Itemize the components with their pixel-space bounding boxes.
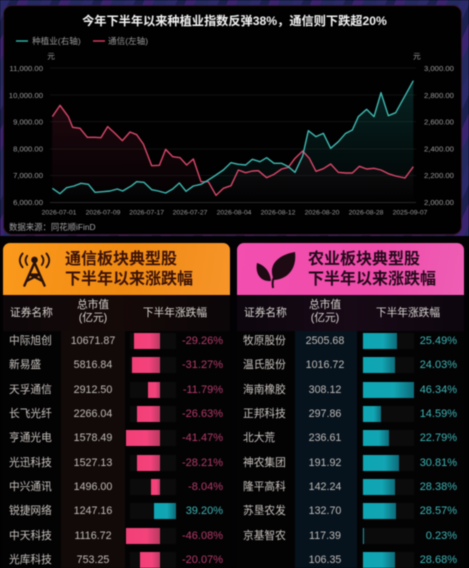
row: 132.70 — [309, 505, 341, 517]
icon: leaves — [256, 251, 296, 289]
row: 30.81% — [420, 457, 457, 469]
right axis: 3,000.00 — [424, 64, 454, 73]
date axis: 2026-07-09 — [86, 210, 121, 216]
left axis: 11,000.00 — [9, 64, 43, 73]
row — [9, 454, 224, 472]
table header: 证券名称 — [244, 307, 287, 319]
row — [9, 527, 224, 545]
right axis — [413, 52, 454, 207]
table header: 证券名称 — [10, 307, 53, 319]
row: 京基智农 — [243, 530, 286, 542]
row: 28.68% — [420, 554, 457, 566]
data source: 数据来源：同花顺iFinD — [9, 222, 96, 232]
left axis: 6,000.00 — [13, 198, 43, 207]
date axis: 2026-07-27 — [173, 210, 208, 216]
row: 长飞光纤 — [9, 408, 52, 420]
date axis: 2025-09-07 — [393, 210, 428, 216]
date axis: 2026-08-28 — [349, 210, 384, 216]
row — [242, 332, 458, 350]
row: 22.79% — [420, 432, 457, 444]
table header: 总市值 — [309, 299, 341, 311]
row — [243, 478, 458, 496]
left axis — [9, 52, 55, 207]
date axis: 2026-07-17 — [129, 210, 164, 216]
date axis: 2026-08-04 — [217, 210, 252, 216]
header title: 农业板块典型股 — [308, 251, 420, 268]
row: 1527.13 — [74, 457, 112, 469]
row: 北大荒 — [243, 432, 275, 444]
date axis — [42, 210, 428, 216]
table header: 下半年涨跌幅 — [376, 307, 440, 319]
row: 0.23% — [426, 530, 457, 542]
row: 308.12 — [309, 384, 341, 396]
row: 光迅科技 — [9, 457, 52, 469]
row: -28.21% — [182, 457, 223, 469]
row: -26.63% — [182, 408, 223, 420]
right axis: 2,800.00 — [424, 91, 454, 100]
row: 温氏股份 — [243, 359, 286, 371]
row — [242, 429, 458, 447]
row: 753.25 — [77, 554, 109, 566]
right axis: 2,400.00 — [424, 144, 454, 154]
row: 2266.04 — [74, 408, 112, 420]
table header: (亿元) — [311, 312, 339, 324]
row — [9, 551, 224, 568]
row: 2505.68 — [306, 335, 344, 347]
row: 正邦科技 — [243, 408, 286, 420]
row: 24.03% — [420, 359, 457, 371]
row: 牧原股份 — [243, 335, 286, 347]
header title: 通信板块典型股 — [65, 251, 177, 268]
row: 1116.72 — [74, 530, 112, 542]
row — [243, 502, 458, 520]
row: 天孚通信 — [9, 384, 52, 396]
row: 2912.50 — [74, 384, 112, 396]
row — [308, 551, 458, 568]
row: 海南橡胶 — [243, 384, 286, 396]
row: 46.34% — [420, 384, 457, 396]
row: -46.08% — [182, 530, 223, 542]
row: -31.27% — [182, 359, 223, 371]
row: -8.04% — [188, 481, 223, 493]
row: 隆平高科 — [243, 481, 286, 493]
table header: (亿元) — [79, 312, 107, 324]
row: -41.47% — [182, 432, 223, 444]
row: 锐捷网络 — [9, 505, 52, 517]
row — [242, 454, 458, 472]
row — [9, 356, 224, 374]
right axis: 2,200.00 — [424, 171, 454, 180]
row: 1578.49 — [74, 432, 112, 444]
header: communications — [3, 243, 230, 295]
lower dark background — [0, 236, 469, 568]
header title — [64, 250, 193, 288]
row: 光库科技 — [9, 554, 52, 566]
row: 142.24 — [309, 481, 341, 493]
legend — [16, 35, 148, 46]
row: 神农集团 — [243, 457, 286, 469]
row: 1247.16 — [74, 505, 112, 517]
row — [9, 405, 224, 423]
left axis: 7,000.00 — [13, 171, 43, 180]
row — [243, 528, 458, 544]
row — [243, 405, 458, 423]
left axis: 8,000.00 — [13, 144, 43, 154]
row: 28.38% — [420, 481, 457, 493]
row: 14.59% — [420, 408, 457, 420]
row: 106.35 — [309, 554, 341, 566]
row — [8, 502, 224, 520]
right axis: 元 — [413, 52, 421, 61]
row: 亨通光电 — [9, 432, 52, 444]
row: 117.39 — [309, 530, 341, 542]
row: 1496.00 — [74, 481, 112, 493]
row: 236.61 — [309, 432, 341, 444]
row: 191.92 — [309, 457, 341, 469]
row: -29.26% — [182, 335, 223, 347]
left axis: 元 — [47, 52, 55, 61]
header title: 下半年以来涨跌幅 — [308, 271, 436, 288]
legend: 通信(左轴) — [108, 35, 148, 46]
header: agriculture — [237, 243, 464, 295]
panel: communications stocks — [3, 243, 230, 568]
row — [9, 429, 224, 447]
row: 1016.72 — [306, 359, 344, 371]
header title — [308, 250, 436, 288]
right axis: 2,600.00 — [424, 118, 454, 126]
chart title: 今年下半年以来种植业指数反弹38%，通信则下跌超20% — [82, 13, 387, 28]
row — [243, 381, 458, 399]
right axis: 2,000.00 — [424, 198, 454, 207]
row: 28.57% — [420, 505, 457, 517]
row: 苏垦农发 — [243, 505, 286, 517]
row: 中兴通讯 — [9, 481, 52, 493]
row: 中际旭创 — [9, 335, 52, 347]
row: -20.07% — [182, 554, 223, 566]
row: 新易盛 — [9, 359, 41, 371]
line chart — [8, 13, 454, 232]
left axis: 10,000.00 — [9, 91, 43, 100]
row: 25.49% — [420, 335, 457, 347]
table header — [3, 295, 230, 331]
row — [9, 478, 224, 496]
table header: 总市值 — [77, 299, 109, 311]
table header — [237, 295, 464, 331]
row: 5816.84 — [74, 359, 112, 371]
line: 种植业 — [52, 81, 413, 194]
row: 中天科技 — [9, 530, 52, 542]
value column tint — [61, 331, 125, 568]
row: 10671.87 — [71, 335, 115, 347]
row: 39.20% — [186, 505, 223, 517]
left axis: 9,000.00 — [13, 118, 43, 126]
line: 通信 — [52, 105, 413, 195]
panel: agriculture stocks — [237, 243, 464, 568]
table header: 下半年涨跌幅 — [143, 307, 207, 319]
row — [9, 332, 224, 350]
row — [9, 381, 224, 399]
icon: signal tower — [18, 252, 51, 288]
data lines — [52, 81, 413, 202]
header title: 下半年以来涨跌幅 — [65, 271, 193, 288]
panel: line chart — [3, 5, 462, 235]
row — [243, 356, 458, 374]
value column tint — [295, 331, 357, 568]
date axis: 2026-08-20 — [305, 210, 340, 216]
legend: 种植业(右轴) — [32, 35, 81, 46]
date axis: 2026-08-12 — [261, 210, 296, 216]
row: 297.86 — [309, 408, 341, 420]
date axis: 2026-07-01 — [42, 210, 77, 216]
row: -11.79% — [183, 384, 223, 396]
